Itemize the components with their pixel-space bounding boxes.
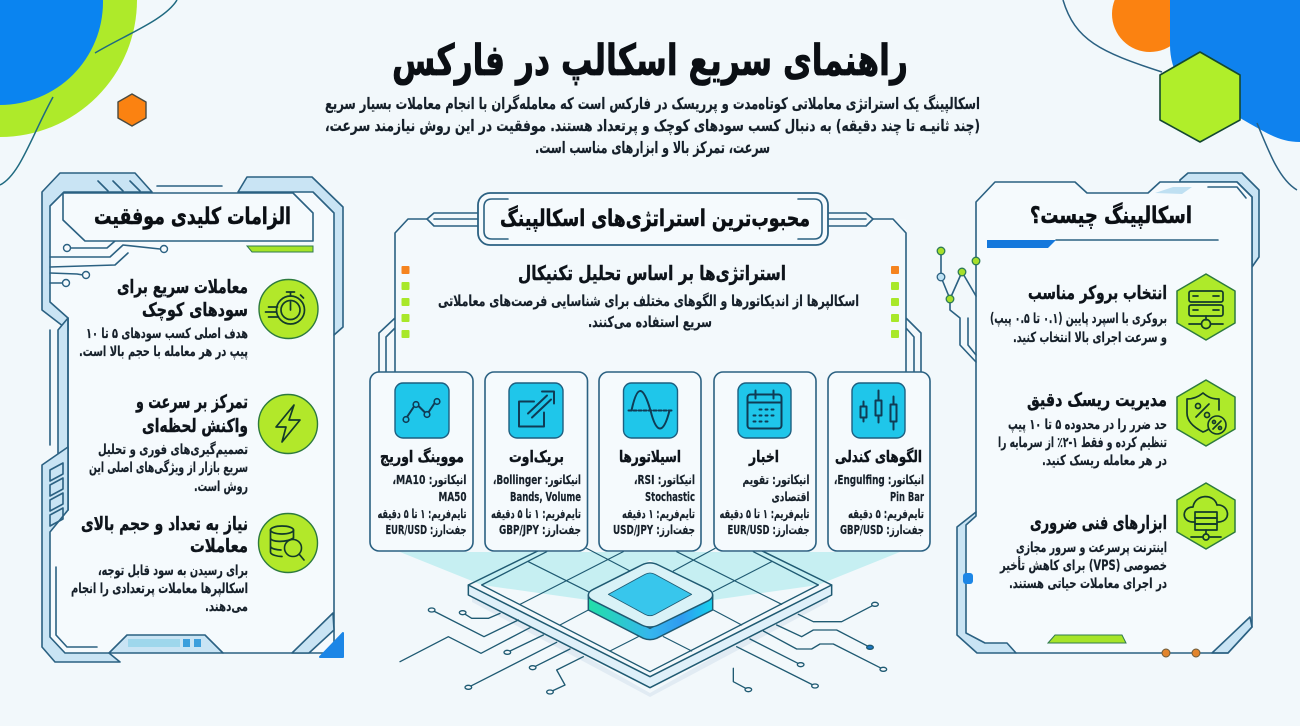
icon: orange hexagon [118,94,146,126]
card: news: اقتصادی [772,489,810,504]
card: breakout: Bands, Volume [510,489,581,504]
indicator dots right [891,266,899,338]
intro text: (چند ثانیـه تا چند دقیقه) به دنبال کسب سودهای کوچک و پرتعداد هستند. موفقیت در این روش نیازمند سرعت، [325,116,980,136]
icon: cloud server [1177,483,1235,549]
item: speed focus [89,392,318,495]
intro text [325,94,980,157]
item: fast trades: پیپ در هر معامله با حجم بالا است. [79,344,248,360]
item: high volume: اسکالپرها معاملات پرتعدادی را انجام [71,581,248,597]
item: fast trades: معاملات سریع برای [117,277,248,298]
card: moving average: تایم‌فریم: ۱ تا ۵ دقیقه [378,506,466,521]
item: speed focus: سریع بازار از ویژگی‌های اصلی این [89,459,248,476]
card: oscillators: جفت‌ارز: USD/JPY [613,522,695,537]
intro text: سرعت، تمرکز بالا و ابزارهای مناسب است. [535,138,770,157]
icon: calendar [738,383,791,438]
strategies subheading: استراتژی‌ها بر اساس تحلیل تکنیکال [518,261,786,285]
panel frame [379,213,921,372]
circuit nodes left of panel [937,247,980,362]
strategies subheading: اسکالپرها از اندیکاتورها و الگوهای مختلف برای شناسایی فرصت‌های معاملاتی [438,292,859,311]
item: technical tools: ابزارهای فنی ضروری [1030,513,1167,534]
icon: lightning bolt [258,394,318,454]
heading pill: popular strategies [478,193,828,245]
chip board illustration [400,545,900,697]
icon: candlesticks [852,383,905,438]
card: breakout: تایم‌فریم: ۱ تا ۵ دقیقه [491,506,581,521]
item: choose broker [990,274,1235,346]
panel: key requirements [42,173,343,662]
card: moving average: انیکاتور: MA10، [392,472,466,487]
item: choose broker: بروکری با اسپرد پایین (۰.۱ تا ۰.۵ پیپ) [990,311,1167,327]
item: risk management: در هر معامله ریسک کنید. [1042,453,1167,469]
intro text: اسکالپینگ یک استراتژی معاملاتی کوتاه‌مدت و پرریسک در فارکس است که معامله‌گران با انجام معاملات بسیار سریع [325,94,980,114]
panel: popular strategies [370,193,930,551]
heading box: key requirements [63,193,313,252]
item: choose broker: انتخاب بروکر مناسب [1028,283,1167,304]
heading pill: popular strategies: محبوب‌ترین استراتژی‌های اسکالپینگ [500,205,810,232]
card: breakout: انیکاتور: Bollinger، [493,472,581,487]
card: oscillators: اسیلاتورها [619,447,681,466]
panel frame [957,173,1259,657]
card: news [714,372,816,551]
item: fast trades: سودهای کوچک [142,300,248,321]
card: news: جفت‌ارز: EUR/USD [728,522,810,537]
icon: line chart [395,383,449,438]
icon: server hexagon [1177,274,1235,340]
heading: what is scalping: اسکالپینگ چیست؟ [1030,202,1192,229]
card: breakout [485,372,588,551]
card: candle patterns: الگوهای کندلی [835,447,922,466]
title: راهنمای سریع اسکالپ در فارکس [392,36,908,86]
indicator dots left [402,266,410,338]
heading box: key requirements: الزامات کلیدی موفقیت [94,204,291,230]
card: news: اخبار [748,447,779,466]
strategies subheading: سریع استفاده می‌کنند. [588,313,712,331]
icon: database search [258,514,318,572]
card: candle patterns: جفت‌ارز: GBP/USD [840,522,924,537]
item: high volume: برای رسیدن به سود قابل توجه، [98,563,248,579]
item: fast trades [79,277,318,360]
card: breakout: بریک‌اوت [509,447,564,466]
item: high volume: نیاز به تعداد و حجم بالای [81,514,248,535]
card: moving average: جفت‌ارز: EUR/USD [386,522,466,537]
item: high volume: می‌دهند. [205,599,248,615]
card: news: تایم‌فریم: ۱ تا ۵ دقیقه [720,506,810,521]
item: speed focus: روش است. [194,479,248,495]
item: risk management: تنظیم کرده و فقط ۱-۲٪ از سرمایه را [998,435,1167,451]
card: moving average: مووینگ اوریج [380,447,464,466]
icon: sine wave [624,383,678,438]
card: moving average: MA50 [438,489,467,504]
item: risk management [998,380,1235,469]
card: oscillators: انیکاتور: RSI، [634,472,695,487]
card: candle patterns: Pin Bar [890,489,925,504]
item: speed focus: تصمیم‌گیری‌های فوری و تحلیل [98,441,248,458]
panel: what is scalping [937,173,1259,657]
item: technical tools [999,483,1235,592]
card: candle patterns: انیکاتور: Engulfing، [834,472,924,487]
card: candle patterns: تایم‌فریم: ۵ دقیقه [848,506,924,521]
icon: stopwatch [259,280,318,338]
item: high volume: معاملات [190,536,248,557]
card: oscillators: Stochastic [645,489,695,504]
decoration: top-right shapes [1063,0,1300,190]
item: fast trades: هدف اصلی کسب سودهای ۵ تا ۱۰ [86,326,248,342]
card: moving average [370,372,473,551]
icon: breakout arrow [509,383,563,438]
item: risk management: مدیریت ریسک دقیق [1027,390,1167,411]
item: technical tools: اینترنت پرسرعت و سرور مجازی [1016,540,1167,556]
item: high volume [71,514,318,615]
item: technical tools: در اجرای معاملات حیاتی هستند. [1009,576,1167,592]
strategies subheading [438,261,859,331]
item: technical tools: خصوصی (VPS) برای کاهش تأخیر [999,556,1167,574]
card: oscillators: تایم‌فریم: ۱ دقیقه [622,506,695,521]
card: candle patterns [828,372,930,551]
item: choose broker: و سرعت اجرای بالا انتخاب کنید. [1013,330,1167,346]
card: breakout: جفت‌ارز: GBP/JPY [499,522,581,537]
card: oscillators [599,372,701,551]
panel frame [42,173,343,662]
item: risk management: حد ضرر را در محدوده ۵ تا ۱۰ پیپ [1008,417,1167,433]
icon: shield percent [1177,380,1235,446]
item: speed focus: تمرکز بر سرعت و [135,392,248,413]
decoration: top-left circles [0,0,177,185]
item: speed focus: واکنش لحظه‌ای [142,416,248,437]
card: news: انیکاتور: تقویم [742,472,810,487]
